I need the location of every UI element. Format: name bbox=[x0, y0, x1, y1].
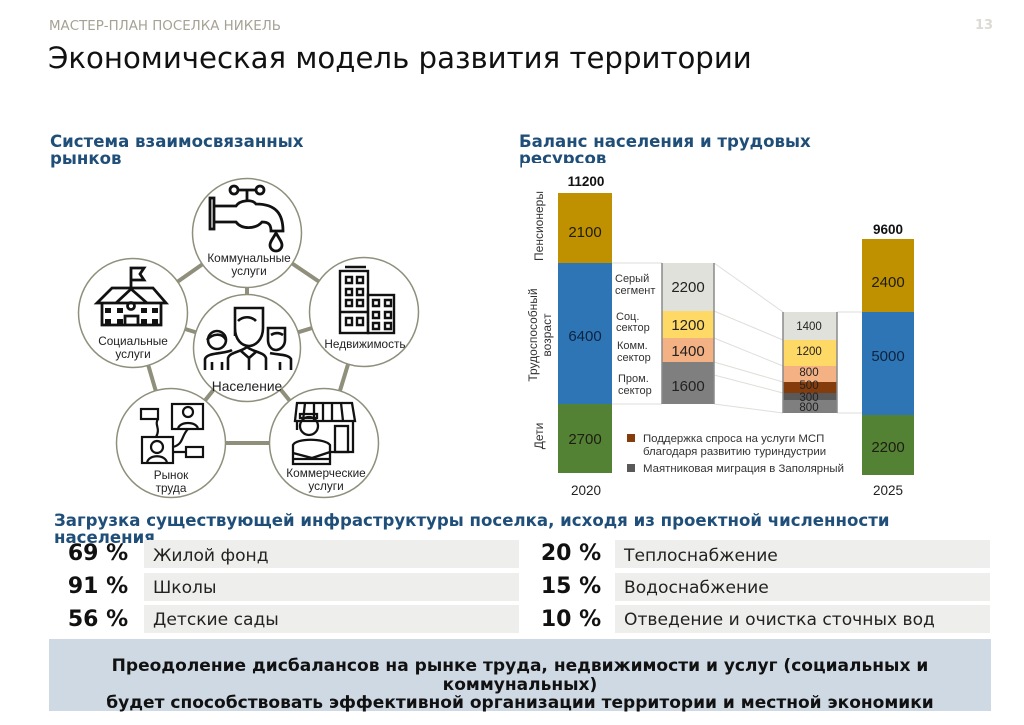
section label: МАСТЕР-ПЛАН ПОСЕЛКА НИКЕЛЬ bbox=[49, 19, 281, 34]
conclusion callout bbox=[49, 639, 991, 711]
bar: 2020 working-age breakdown: 1400 bbox=[671, 343, 705, 360]
conclusion callout: будет способствовать эффективной организации территории и местной экономики bbox=[106, 693, 934, 713]
row: schools bbox=[68, 573, 519, 601]
sector labels: Соц. bbox=[616, 311, 639, 323]
row: kindergartens bbox=[68, 605, 519, 633]
node: labour market bbox=[116, 388, 226, 498]
legend bbox=[627, 433, 844, 475]
node: population: Население bbox=[212, 379, 283, 394]
conclusion callout: коммунальных) bbox=[443, 674, 597, 694]
heading: markets: Система взаимосвязанных рынков bbox=[50, 133, 303, 168]
axis labels: Трудоспособный bbox=[526, 288, 540, 382]
heading: infrastructure load: Загрузка существующей инфраструктуры поселка, исходя из проектной численности населения bbox=[54, 512, 889, 547]
bar: 2025: 9600 bbox=[873, 222, 903, 237]
bar: 2025 working-age breakdown: 800 bbox=[799, 367, 819, 379]
conclusion callout: Преодоление дисбалансов на рынке труда, недвижимости и услуг (социальных и bbox=[112, 656, 928, 676]
row: housing: 69 % bbox=[68, 541, 128, 566]
node: social services: Социальные bbox=[98, 334, 168, 348]
row: water supply: 15 % bbox=[541, 574, 601, 599]
node: utilities: услуги bbox=[231, 264, 267, 278]
sector labels: сектор bbox=[618, 385, 652, 397]
row: kindergartens: Детские сады bbox=[153, 610, 279, 630]
row: water supply: Водоснабжение bbox=[624, 578, 769, 598]
row: housing bbox=[68, 540, 519, 568]
sector labels: Серый bbox=[615, 273, 649, 285]
sector labels: Пром. bbox=[618, 373, 649, 385]
node: population bbox=[194, 294, 300, 402]
node: utilities: Коммунальные bbox=[207, 251, 291, 265]
node: utilities bbox=[192, 178, 302, 288]
node: commercial services bbox=[270, 388, 378, 498]
axis labels bbox=[526, 191, 554, 449]
heading: balance: Баланс населения и трудовых ресурсов bbox=[519, 133, 811, 168]
bar: 2025 working-age breakdown: 500 bbox=[799, 380, 819, 392]
bar: 2020 working-age breakdown: 1600 bbox=[671, 378, 705, 395]
bar: 2020: 2700 bbox=[568, 431, 602, 448]
bar: 2020 working-age breakdown bbox=[662, 263, 714, 404]
node: labour market: Рынок bbox=[154, 468, 189, 482]
bar: 2025: 5000 bbox=[871, 348, 905, 365]
bar: 2020: 2020 bbox=[571, 483, 601, 498]
row: sewage bbox=[541, 605, 990, 633]
row: schools: 91 % bbox=[68, 574, 128, 599]
bar: 2020: 11200 bbox=[568, 174, 604, 189]
connector lines bbox=[612, 263, 862, 413]
row: heating bbox=[541, 540, 990, 568]
node: commercial services: Коммерческие bbox=[286, 466, 366, 480]
title: Экономическая модель развития территории bbox=[48, 41, 752, 75]
row: sewage: 10 % bbox=[541, 607, 601, 632]
sector labels: Комм. bbox=[617, 340, 648, 352]
bar: 2025 working-age breakdown: 1400 bbox=[796, 321, 822, 333]
bar: 2025 working-age breakdown: 1200 bbox=[796, 346, 822, 358]
bar: 2025: 2200 bbox=[871, 439, 905, 456]
node: real estate bbox=[310, 258, 418, 366]
row: heating: 20 % bbox=[541, 541, 601, 566]
axis labels: Дети bbox=[532, 423, 546, 449]
bar: 2020 working-age breakdown: 2200 bbox=[671, 279, 705, 296]
bar: 2025 working-age breakdown: 800 bbox=[799, 402, 819, 414]
legend: Поддержка спроса на услуги МСП bbox=[643, 433, 824, 445]
chart: population and labour balance bbox=[526, 174, 914, 498]
bar: 2025 working-age breakdown: 300 bbox=[799, 392, 819, 404]
axis labels: Пенсионеры bbox=[532, 191, 546, 261]
bar: 2020 working-age breakdown: 1200 bbox=[671, 317, 705, 334]
sector labels: сектор bbox=[617, 352, 651, 364]
sector labels: сектор bbox=[616, 322, 650, 334]
node: commercial services: услуги bbox=[308, 479, 344, 493]
legend: Маятниковая миграция в Заполярный bbox=[643, 463, 844, 475]
row: housing: Жилой фонд bbox=[153, 546, 269, 566]
row: heating: Теплоснабжение bbox=[624, 546, 778, 566]
row: kindergartens: 56 % bbox=[68, 607, 128, 632]
axis labels: возраст bbox=[540, 313, 554, 357]
diagram: interconnected markets bbox=[78, 178, 420, 498]
sector labels bbox=[615, 273, 655, 397]
row: sewage: Отведение и очистка сточных вод bbox=[624, 610, 935, 630]
bar: 2025 bbox=[862, 222, 914, 498]
bar: 2025: 2025 bbox=[873, 483, 903, 498]
bar: 2025 working-age breakdown bbox=[783, 312, 837, 414]
row: schools: Школы bbox=[153, 578, 216, 598]
legend: благодаря развитию туриндустрии bbox=[643, 446, 826, 458]
row: water supply bbox=[541, 573, 990, 601]
node: real estate: Недвижимость bbox=[324, 337, 406, 351]
bar: 2020 bbox=[558, 174, 612, 498]
page number: 13 bbox=[975, 18, 993, 33]
node: social services: услуги bbox=[115, 347, 151, 361]
bar: 2025: 2400 bbox=[871, 274, 905, 291]
bar: 2020: 2100 bbox=[568, 224, 602, 241]
sector labels: сегмент bbox=[615, 285, 655, 297]
bar: 2020: 6400 bbox=[568, 328, 602, 345]
node: social services bbox=[78, 258, 188, 368]
node: labour market: труда bbox=[156, 481, 187, 495]
